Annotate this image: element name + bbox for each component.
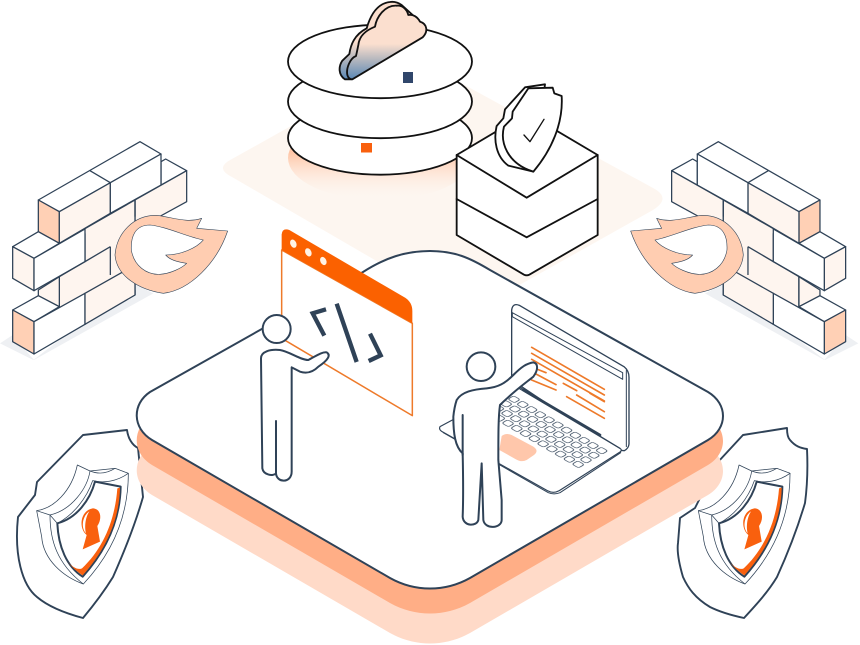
laptop base [440,387,621,492]
orange indicator [361,143,372,152]
box [457,114,598,275]
top brick row [697,142,820,212]
icon: flame [115,215,228,293]
shield inner with keyhole [698,465,790,584]
platform orange layer [137,276,723,614]
shield inner with keyhole [37,465,128,584]
bottom brick row [799,296,846,322]
keyboard [482,394,610,469]
icon: cloud [340,2,426,79]
disc shadow [288,116,472,200]
body [261,350,329,481]
head [467,352,495,381]
middle disc [288,65,472,138]
code lines [532,347,604,418]
top disc [288,25,472,98]
keyhole [743,508,762,549]
bottom disc [288,101,472,175]
shield outer [678,428,807,618]
platform top [137,251,723,588]
code symbol [313,304,381,362]
icon: flame [631,215,743,293]
server box with shield [457,84,598,275]
keyhole [82,508,100,549]
hinge bar [523,390,600,435]
right brick wall [631,142,858,360]
body [453,362,537,527]
wall shadow [705,283,858,360]
left brick wall [0,142,228,360]
window frame [282,250,412,416]
laptop [440,305,629,494]
platform [137,251,723,644]
person left [261,315,329,481]
right lock shield [678,428,807,618]
database stack [288,2,472,200]
person right [453,352,537,527]
laptop screen [512,305,629,451]
orange rim [729,488,782,575]
top brick row [38,142,161,212]
middle brick row [13,232,59,258]
background plate [223,61,662,310]
code window [282,229,412,416]
window title bar [282,229,412,323]
back bricks [161,159,187,185]
middle brick row [799,232,846,258]
orange rim [68,488,120,575]
trackpad [499,434,537,461]
wall shadow [0,283,153,360]
head [263,315,291,343]
back bricks [672,159,697,185]
platform light base layer [137,306,723,644]
bottom brick row [13,296,59,322]
icon: check shield [495,84,562,172]
navy indicator [403,72,413,83]
left lock shield [17,430,143,618]
shield outer [17,430,143,618]
window dots [289,238,328,266]
